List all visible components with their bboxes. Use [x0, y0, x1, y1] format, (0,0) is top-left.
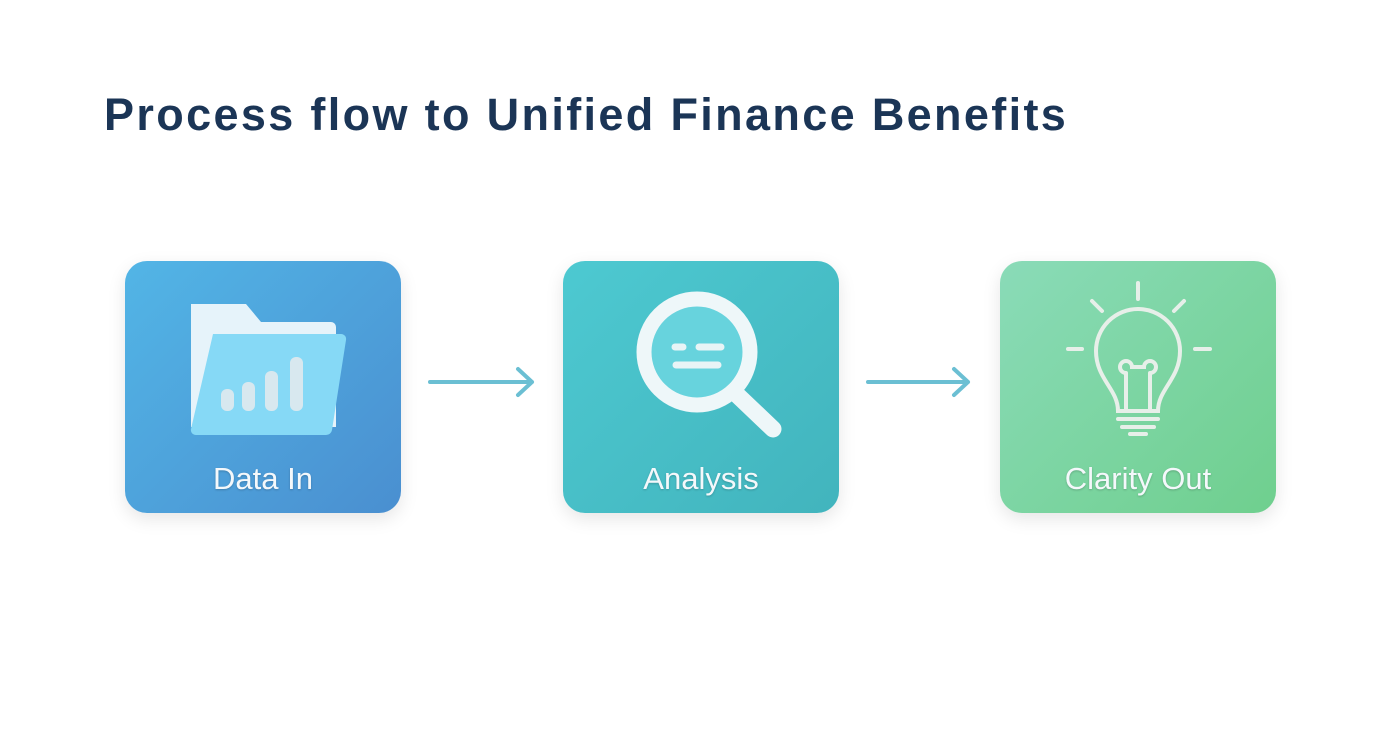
icon: light bulb: [1066, 281, 1212, 436]
icon: folder with bars: [190, 304, 346, 435]
title: Process flow to Unified Finance Benefits: [104, 89, 1068, 140]
icon: magnifier: [636, 292, 782, 438]
label: Data In: [213, 461, 313, 496]
panel: clarity out: [1000, 261, 1276, 513]
arrow 2: [866, 366, 970, 398]
panel: data in: [125, 261, 401, 513]
panel: analysis: [563, 261, 839, 513]
arrow 1: [428, 366, 534, 398]
label: Analysis: [643, 461, 759, 496]
label: Clarity Out: [1065, 461, 1211, 496]
